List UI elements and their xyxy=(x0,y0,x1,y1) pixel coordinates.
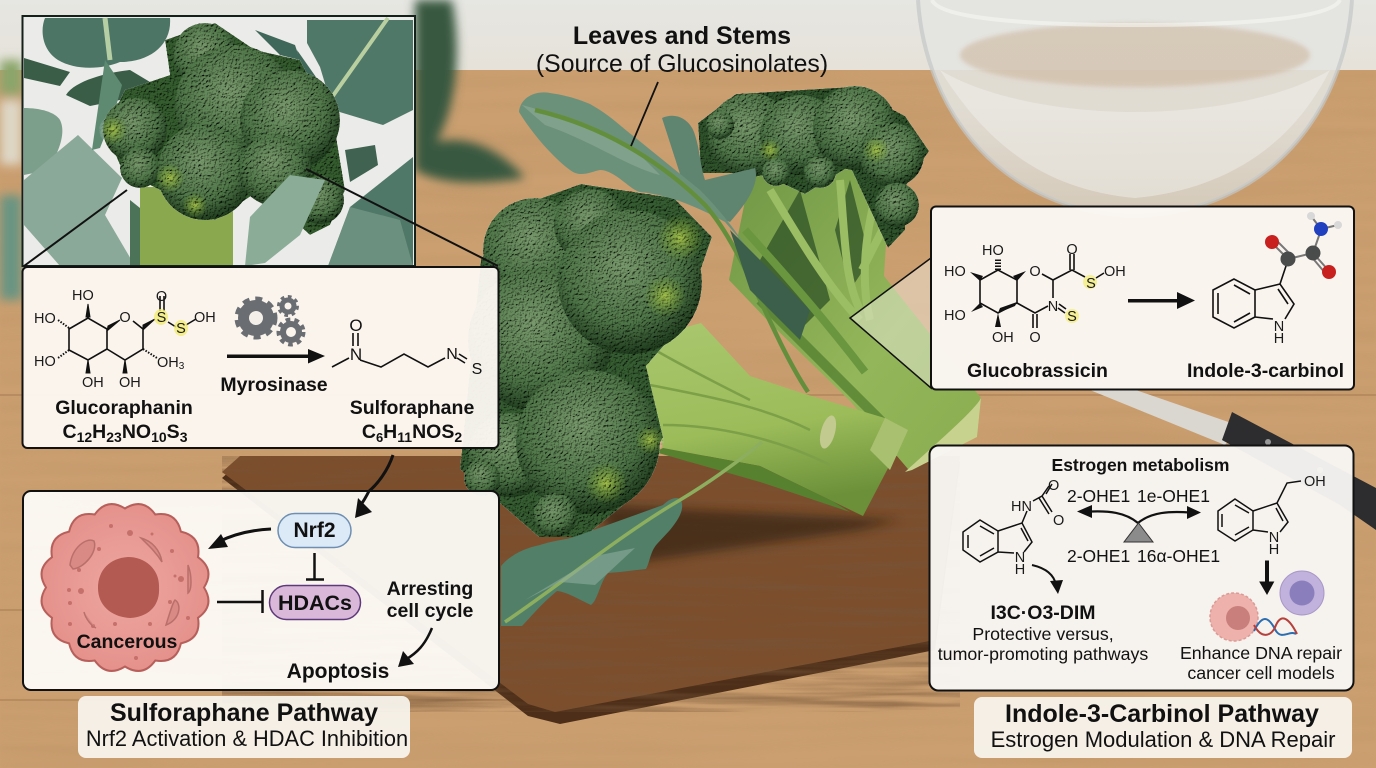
node: HDACs: HDACs xyxy=(278,591,352,615)
formula: Sulforaphane: C xyxy=(362,421,376,443)
molecule: left indole urea xyxy=(963,478,1064,578)
molecule: glucoraphanin: S xyxy=(157,310,166,326)
arrow: to DNA repair xyxy=(1260,561,1274,594)
molecule: indole-3-carbinol right: N xyxy=(1269,530,1279,546)
arrow: indole to DIM xyxy=(1032,565,1063,594)
molecule: glucoraphanin: 3 xyxy=(179,361,185,372)
molecule: left indole urea: O xyxy=(1048,478,1059,494)
glass bowl of water xyxy=(918,0,1352,216)
formula: Glucoraphanin: H xyxy=(92,421,106,443)
heading: estrogen metabolism: Estrogen metabolism xyxy=(1052,455,1229,475)
molecule: glucoraphanin: OH xyxy=(119,375,141,391)
formula: Glucoraphanin: C xyxy=(63,421,77,443)
panel: estrogen metabolism xyxy=(930,446,1354,690)
formula: Glucoraphanin: 3 xyxy=(180,429,188,445)
bottom leaf xyxy=(501,442,762,626)
inset front leaf xyxy=(245,175,325,266)
molecule: glucoraphanin: OH xyxy=(82,375,104,391)
leader line: leaves xyxy=(631,82,658,146)
formula: Sulforaphane: 6 xyxy=(376,430,383,445)
formula: Sulforaphane: H xyxy=(383,421,397,443)
panel: glucobrassicin to indole-3-carbinol xyxy=(931,206,1354,390)
molecule: sulforaphane xyxy=(332,316,482,378)
formula: Glucoraphanin: NO xyxy=(122,421,151,443)
molecule: sulforaphane: S xyxy=(472,361,482,378)
top leaf and midrib xyxy=(519,92,865,392)
formula: Glucoraphanin: 10 xyxy=(151,429,167,445)
text: arresting cell cycle: cell cycle xyxy=(387,600,474,622)
formula: Glucoraphanin: S xyxy=(167,421,180,443)
balance: 2-OHE1 ratios: 16α-OHE1 xyxy=(1137,546,1220,566)
molecule: glucobrassicin: OH xyxy=(1104,264,1126,280)
molecule: left indole urea: HN xyxy=(1011,499,1032,515)
formula: Sulforaphane: 11 xyxy=(397,429,412,445)
icon: gears xyxy=(238,297,303,344)
arrow: sulforaphane to Nrf2 xyxy=(368,455,393,492)
formula: Glucoraphanin: 12 xyxy=(77,429,92,445)
molecule: glucobrassicin: HO xyxy=(944,308,966,324)
label: Glucobrassicin: Glucobrassicin xyxy=(967,360,1108,382)
text: enhance DNA repair: cancer cell models xyxy=(1187,663,1335,683)
molecule: glucobrassicin: O xyxy=(1029,264,1041,280)
arrow: myrosinase reaction xyxy=(227,349,325,364)
molecule: indole-3-carbinol: H xyxy=(1274,331,1284,347)
molecule: indole-3-carbinol: N xyxy=(1274,319,1284,335)
molecule: glucobrassicin: O xyxy=(1066,242,1078,258)
molecule: left indole urea: N xyxy=(1015,550,1025,566)
text: enhance DNA repair: Enhance DNA repair xyxy=(1180,643,1342,663)
arrow: conversion xyxy=(1128,292,1195,309)
title label: indole-3-carbinol pathway xyxy=(974,697,1352,758)
stem shadow xyxy=(600,505,900,565)
molecule: glucobrassicin: S xyxy=(1086,276,1096,292)
icon: cells and DNA xyxy=(1210,571,1324,641)
label: Myrosinase: Myrosinase xyxy=(220,374,328,396)
arrow: to apoptosis xyxy=(398,628,432,667)
balance: 2-OHE1 ratios xyxy=(1067,486,1220,566)
title label: sulforaphane pathway: Nrf2 Activation & HDAC Inhibition xyxy=(86,726,408,751)
node: Nrf2 xyxy=(278,514,351,548)
molecule: glucoraphanin: O xyxy=(119,310,131,326)
molecule: sulforaphane: N xyxy=(350,345,362,364)
molecule: sulforaphane: N xyxy=(446,346,458,363)
balance: 2-OHE1 ratios: 2-OHE1 xyxy=(1067,546,1130,566)
molecule: left indole urea: O xyxy=(1053,513,1064,529)
arrow: into Nrf2 xyxy=(355,491,372,518)
title label: indole-3-carbinol pathway: Estrogen Modulation & DNA Repair xyxy=(991,727,1335,752)
molecule: indole-3-carbinol right: H xyxy=(1269,542,1279,558)
back stem xyxy=(729,162,981,472)
heading: leaves and stems: Leaves and Stems xyxy=(573,22,791,50)
molecule: glucobrassicin: OH xyxy=(992,330,1014,346)
molecule: glucoraphanin: OH xyxy=(157,355,179,371)
panel: glucoraphanin to sulforaphane xyxy=(22,267,498,448)
inset photo: broccoli plant close-up xyxy=(22,16,415,266)
front stem xyxy=(646,323,908,516)
inset leaves xyxy=(24,18,413,266)
zoom connector lines for inset xyxy=(24,169,498,266)
molecule: glucoraphanin xyxy=(34,288,216,391)
molecule: glucoraphanin: O xyxy=(156,289,167,305)
title label: sulforaphane pathway: Sulforaphane Pathway xyxy=(110,699,378,727)
node: Nrf2: Nrf2 xyxy=(293,519,336,542)
background blurred plants xyxy=(0,0,525,300)
zoom callout pointer: stem xyxy=(850,258,931,388)
molecule: glucobrassicin xyxy=(944,242,1126,346)
molecule: glucobrassicin: N xyxy=(1048,299,1058,315)
molecule: glucoraphanin: HO xyxy=(34,311,56,327)
label: Indole-3-carbinol: Indole-3-carbinol xyxy=(1187,360,1344,382)
molecule: indole-3-carbinol right xyxy=(1218,474,1326,558)
molecule: indole-3-carbinol right: OH xyxy=(1304,474,1326,490)
label: DIM: I3C·O3-DIM xyxy=(990,602,1096,624)
balance: 2-OHE1 ratios: 1e-OHE1 xyxy=(1137,486,1210,506)
label: Sulforaphane: Sulforaphane xyxy=(350,397,474,419)
inhibition: cell to HDACs xyxy=(217,590,262,613)
text: apoptosis: Apoptosis xyxy=(287,660,389,683)
molecule: glucoraphanin: S xyxy=(176,321,186,337)
inset frame xyxy=(22,16,415,266)
molecule: indole-3-carbinol xyxy=(1213,212,1342,347)
panel: sulforaphane pathway diagram xyxy=(23,491,499,690)
text: arresting cell cycle: Arresting xyxy=(387,578,473,600)
molecule: glucoraphanin: OH xyxy=(194,310,216,326)
inset florets xyxy=(99,23,345,235)
front floret head xyxy=(460,184,712,537)
molecule: sulforaphane: O xyxy=(349,316,363,335)
molecule: glucobrassicin: S xyxy=(1067,309,1077,325)
label: Glucoraphanin: Glucoraphanin xyxy=(55,397,193,419)
molecule: glucobrassicin: O xyxy=(1029,330,1041,346)
molecule: left indole urea: H xyxy=(1015,562,1025,578)
text: protective versus tumor-promoting: Protective versus, xyxy=(972,624,1114,644)
title label: indole-3-carbinol pathway: Indole-3-Carbinol Pathway xyxy=(1005,700,1319,728)
icon: cancerous cell xyxy=(42,504,208,671)
arrow: Nrf2 to cell xyxy=(208,529,271,549)
balance: 2-OHE1 ratios: 2-OHE1 xyxy=(1067,486,1130,506)
molecule: glucoraphanin: HO xyxy=(72,288,94,304)
text: protective versus tumor-promoting: tumor-promoting pathways xyxy=(938,644,1148,664)
back floret head xyxy=(698,86,929,248)
knife xyxy=(1085,388,1376,530)
label: Cancerous: Cancerous xyxy=(77,631,178,653)
formula: Sulforaphane: 2 xyxy=(454,429,462,445)
molecule: glucoraphanin: HO xyxy=(34,354,56,370)
formula: Glucoraphanin: 23 xyxy=(106,429,122,445)
title label: sulforaphane pathway xyxy=(78,696,410,758)
molecule: glucobrassicin: HO xyxy=(944,264,966,280)
formula: Sulforaphane: NOS xyxy=(412,421,454,443)
heading: leaves and stems: (Source of Glucosinolates) xyxy=(536,51,828,78)
heading: leaves and stems xyxy=(536,22,828,78)
inhibition: Nrf2 to HDACs xyxy=(306,553,324,580)
cutting board xyxy=(222,456,960,724)
molecule: glucobrassicin: HO xyxy=(982,243,1004,259)
node: HDACs xyxy=(270,586,360,620)
main broccoli xyxy=(460,86,981,626)
